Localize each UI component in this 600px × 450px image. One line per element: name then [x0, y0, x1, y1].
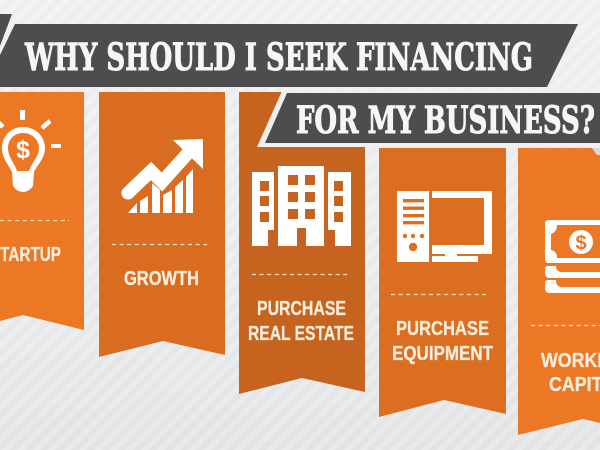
icon: stack of money: [545, 220, 600, 293]
banner: growth: [99, 92, 225, 357]
label: purchase real estate: REAL ESTATE: [248, 322, 354, 345]
icon: rising chart arrow: [128, 139, 203, 213]
label: growth: GROWTH: [124, 267, 199, 290]
icon: desktop computer: [397, 191, 492, 262]
banner: purchase equipment: [379, 148, 506, 417]
header ribbon: second line: [257, 91, 600, 155]
banner: startup: [0, 92, 84, 330]
label: purchase real estate: [248, 297, 354, 345]
icon: buildings: [252, 166, 351, 246]
label: purchase equipment: EQUIPMENT: [392, 342, 493, 365]
header ribbon: first line: [0, 14, 578, 87]
icon: light bulb with dollar: $: [16, 136, 30, 164]
label: purchase real estate: PURCHASE: [257, 297, 346, 320]
banner: purchase real estate: [239, 92, 365, 394]
label: working capital: [541, 349, 600, 396]
banner: working capital: [518, 148, 600, 435]
label: purchase equipment: PURCHASE: [396, 317, 489, 340]
icon: light bulb with dollar: [0, 110, 61, 192]
icon: stack of money: $: [575, 232, 587, 254]
label: purchase equipment: [392, 317, 493, 365]
